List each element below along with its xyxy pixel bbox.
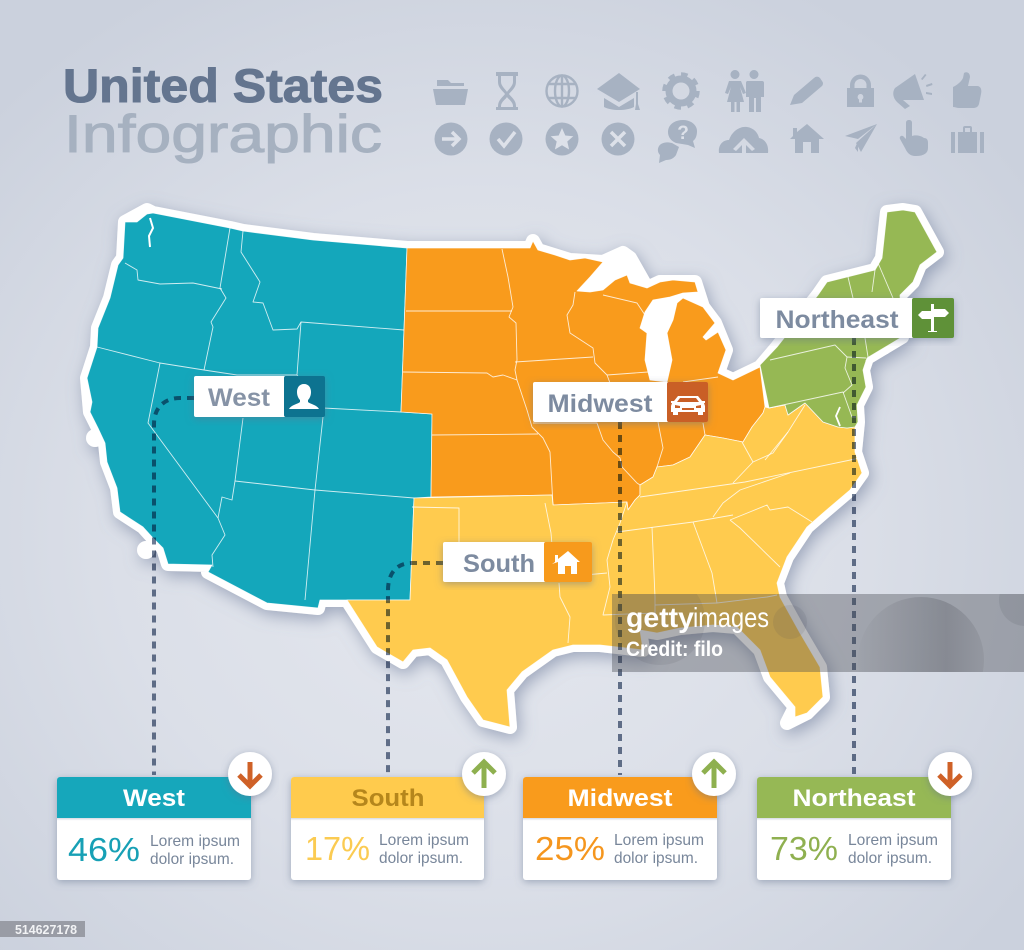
card: south: 17% <box>305 830 370 867</box>
region: northeast <box>760 210 937 428</box>
icon: house <box>790 124 824 153</box>
icon: cloud upload <box>719 127 768 153</box>
map label: west <box>194 376 325 417</box>
card: south <box>291 752 506 880</box>
region: west <box>87 213 432 608</box>
card: midwest: dolor ipsum. <box>614 850 698 867</box>
northeast state lines <box>769 263 893 417</box>
map label: south: South <box>463 550 535 578</box>
south state lines <box>412 405 860 643</box>
icon: hourglass <box>496 72 518 110</box>
card: west: dolor ipsum. <box>150 851 234 868</box>
icon: paper plane <box>845 124 877 152</box>
card: midwest: 25% <box>535 830 605 867</box>
watermark band: getty <box>626 602 694 633</box>
card: midwest <box>523 752 736 880</box>
icon: question bubbles <box>658 120 697 163</box>
image id badge: 514627178 <box>15 923 77 937</box>
connector: midwest <box>618 422 622 775</box>
card: west: 46% <box>68 831 140 868</box>
map label: midwest: Midwest <box>548 390 653 418</box>
card: south: dolor ipsum. <box>379 850 463 867</box>
icon: gear <box>664 74 698 108</box>
icon: pencil <box>790 77 823 105</box>
icon: lock <box>847 75 874 107</box>
card: northeast <box>757 752 972 880</box>
icon: cancel circle <box>602 122 634 156</box>
title: United States <box>63 59 383 112</box>
card: midwest: Lorem ipsum <box>614 832 704 849</box>
icon: people <box>725 70 764 112</box>
trend arrow: down <box>928 752 972 796</box>
map label: south <box>443 542 592 582</box>
watermark band: images <box>693 602 769 633</box>
map label: midwest <box>533 382 708 422</box>
card: west: Lorem ipsum <box>150 833 240 850</box>
icon: signpost <box>918 304 949 332</box>
trend arrow: up <box>462 752 506 796</box>
icon: pointing hand <box>900 120 928 156</box>
card: west <box>57 752 272 880</box>
icon: car <box>671 396 705 415</box>
card: west: West <box>123 785 185 812</box>
card: midwest: Midwest <box>568 785 672 812</box>
card: south: South <box>352 785 424 812</box>
icon: arrow circle <box>434 122 468 156</box>
card: south: Lorem ipsum <box>379 832 469 849</box>
map label: northeast <box>760 298 954 338</box>
card: northeast: Northeast <box>792 785 916 812</box>
icon: thumbs up <box>953 72 981 108</box>
icon: star circle <box>546 122 578 156</box>
card: northeast: 73% <box>770 830 838 867</box>
icon: house <box>552 551 580 574</box>
icon: folder <box>433 80 468 105</box>
card: northeast: dolor ipsum. <box>848 850 932 867</box>
icon: globe <box>546 75 578 107</box>
trend arrow: down <box>228 752 272 796</box>
icon: person <box>289 384 319 409</box>
map label: west: West <box>208 384 271 412</box>
connector: south <box>388 563 443 775</box>
map: white outline with shadow <box>86 210 937 727</box>
west state lines <box>97 228 414 600</box>
watermark band: Credit: filo <box>626 638 723 661</box>
watermark band <box>612 594 1024 672</box>
icon grid <box>433 70 984 163</box>
icon: graduation cap <box>597 73 640 110</box>
title <box>63 59 383 164</box>
icon: megaphone <box>893 74 932 109</box>
lakes <box>640 293 683 382</box>
trend arrow: up <box>692 752 736 796</box>
map label: northeast: Northeast <box>776 306 899 334</box>
title: Infographic <box>64 105 382 164</box>
connector: west <box>154 398 194 775</box>
region: south <box>347 403 862 727</box>
connector: northeast <box>852 338 856 775</box>
icon: check circle <box>490 122 522 156</box>
icon: question bubbles: ? <box>677 123 689 144</box>
region: midwest <box>401 241 765 510</box>
icon: briefcase <box>951 126 984 153</box>
image id badge <box>0 921 85 937</box>
midwest state lines <box>403 249 718 505</box>
card: northeast: Lorem ipsum <box>848 832 938 849</box>
